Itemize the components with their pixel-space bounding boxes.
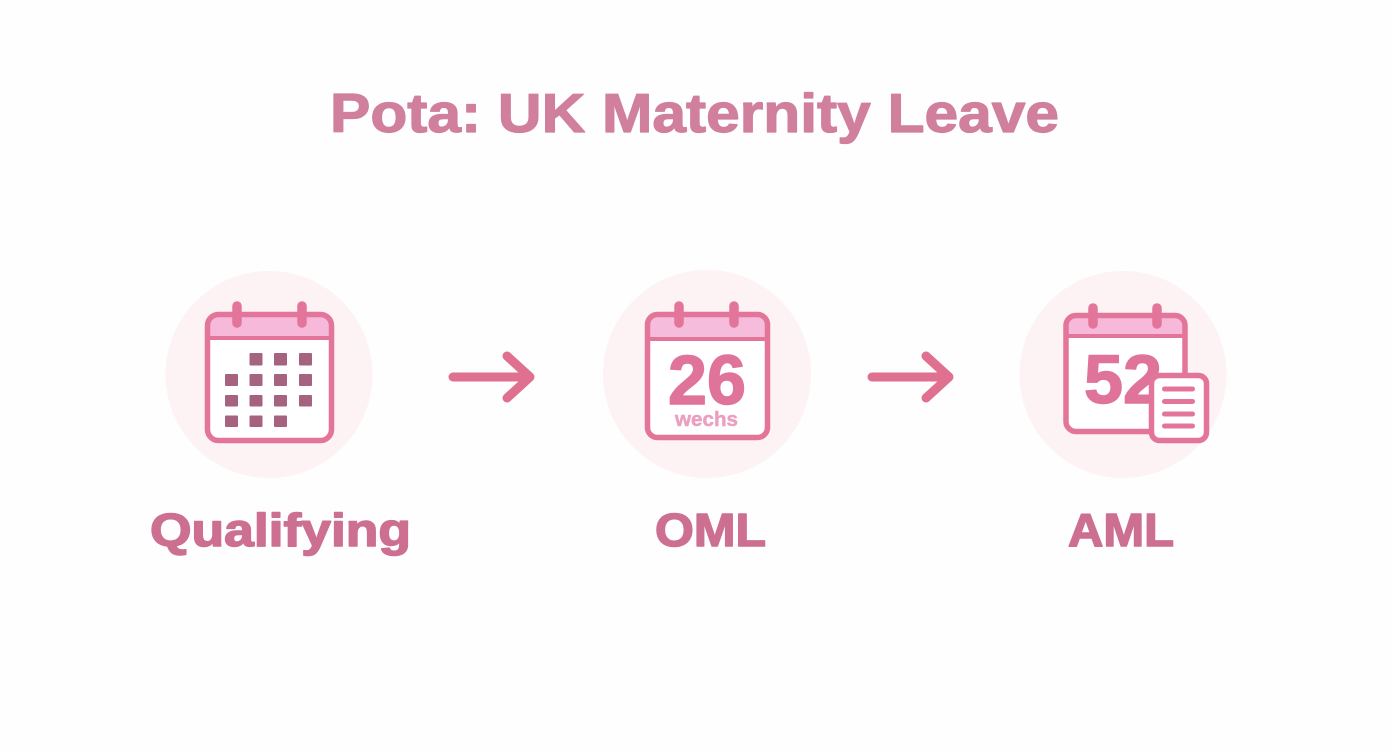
icon background circle: AML xyxy=(1020,271,1226,478)
caption: wechs: wechs xyxy=(674,409,738,431)
icon: document xyxy=(1152,376,1206,440)
label: Qualifying: Qualifying xyxy=(150,504,411,556)
number: 26: 26 xyxy=(668,341,746,419)
label: AML: AML xyxy=(1068,504,1174,556)
icon background circle: OML xyxy=(603,270,811,478)
icon background circle: qualifying xyxy=(166,271,372,478)
step 2: OML xyxy=(603,270,811,556)
icon: calendar 52 with document xyxy=(1065,308,1206,440)
step 3: AML xyxy=(1020,271,1226,556)
arrow: qualifying to OML xyxy=(453,356,530,398)
arrow: OML to AML xyxy=(872,356,949,398)
step 1: qualifying xyxy=(150,271,411,556)
number: 52: 52 xyxy=(1084,341,1162,418)
icon: calendar with day grid xyxy=(207,306,332,440)
icon: calendar 26 weeks xyxy=(647,306,768,438)
label: OML: OML xyxy=(655,504,766,556)
title: Pota: UK Maternity Leave xyxy=(330,82,1059,144)
